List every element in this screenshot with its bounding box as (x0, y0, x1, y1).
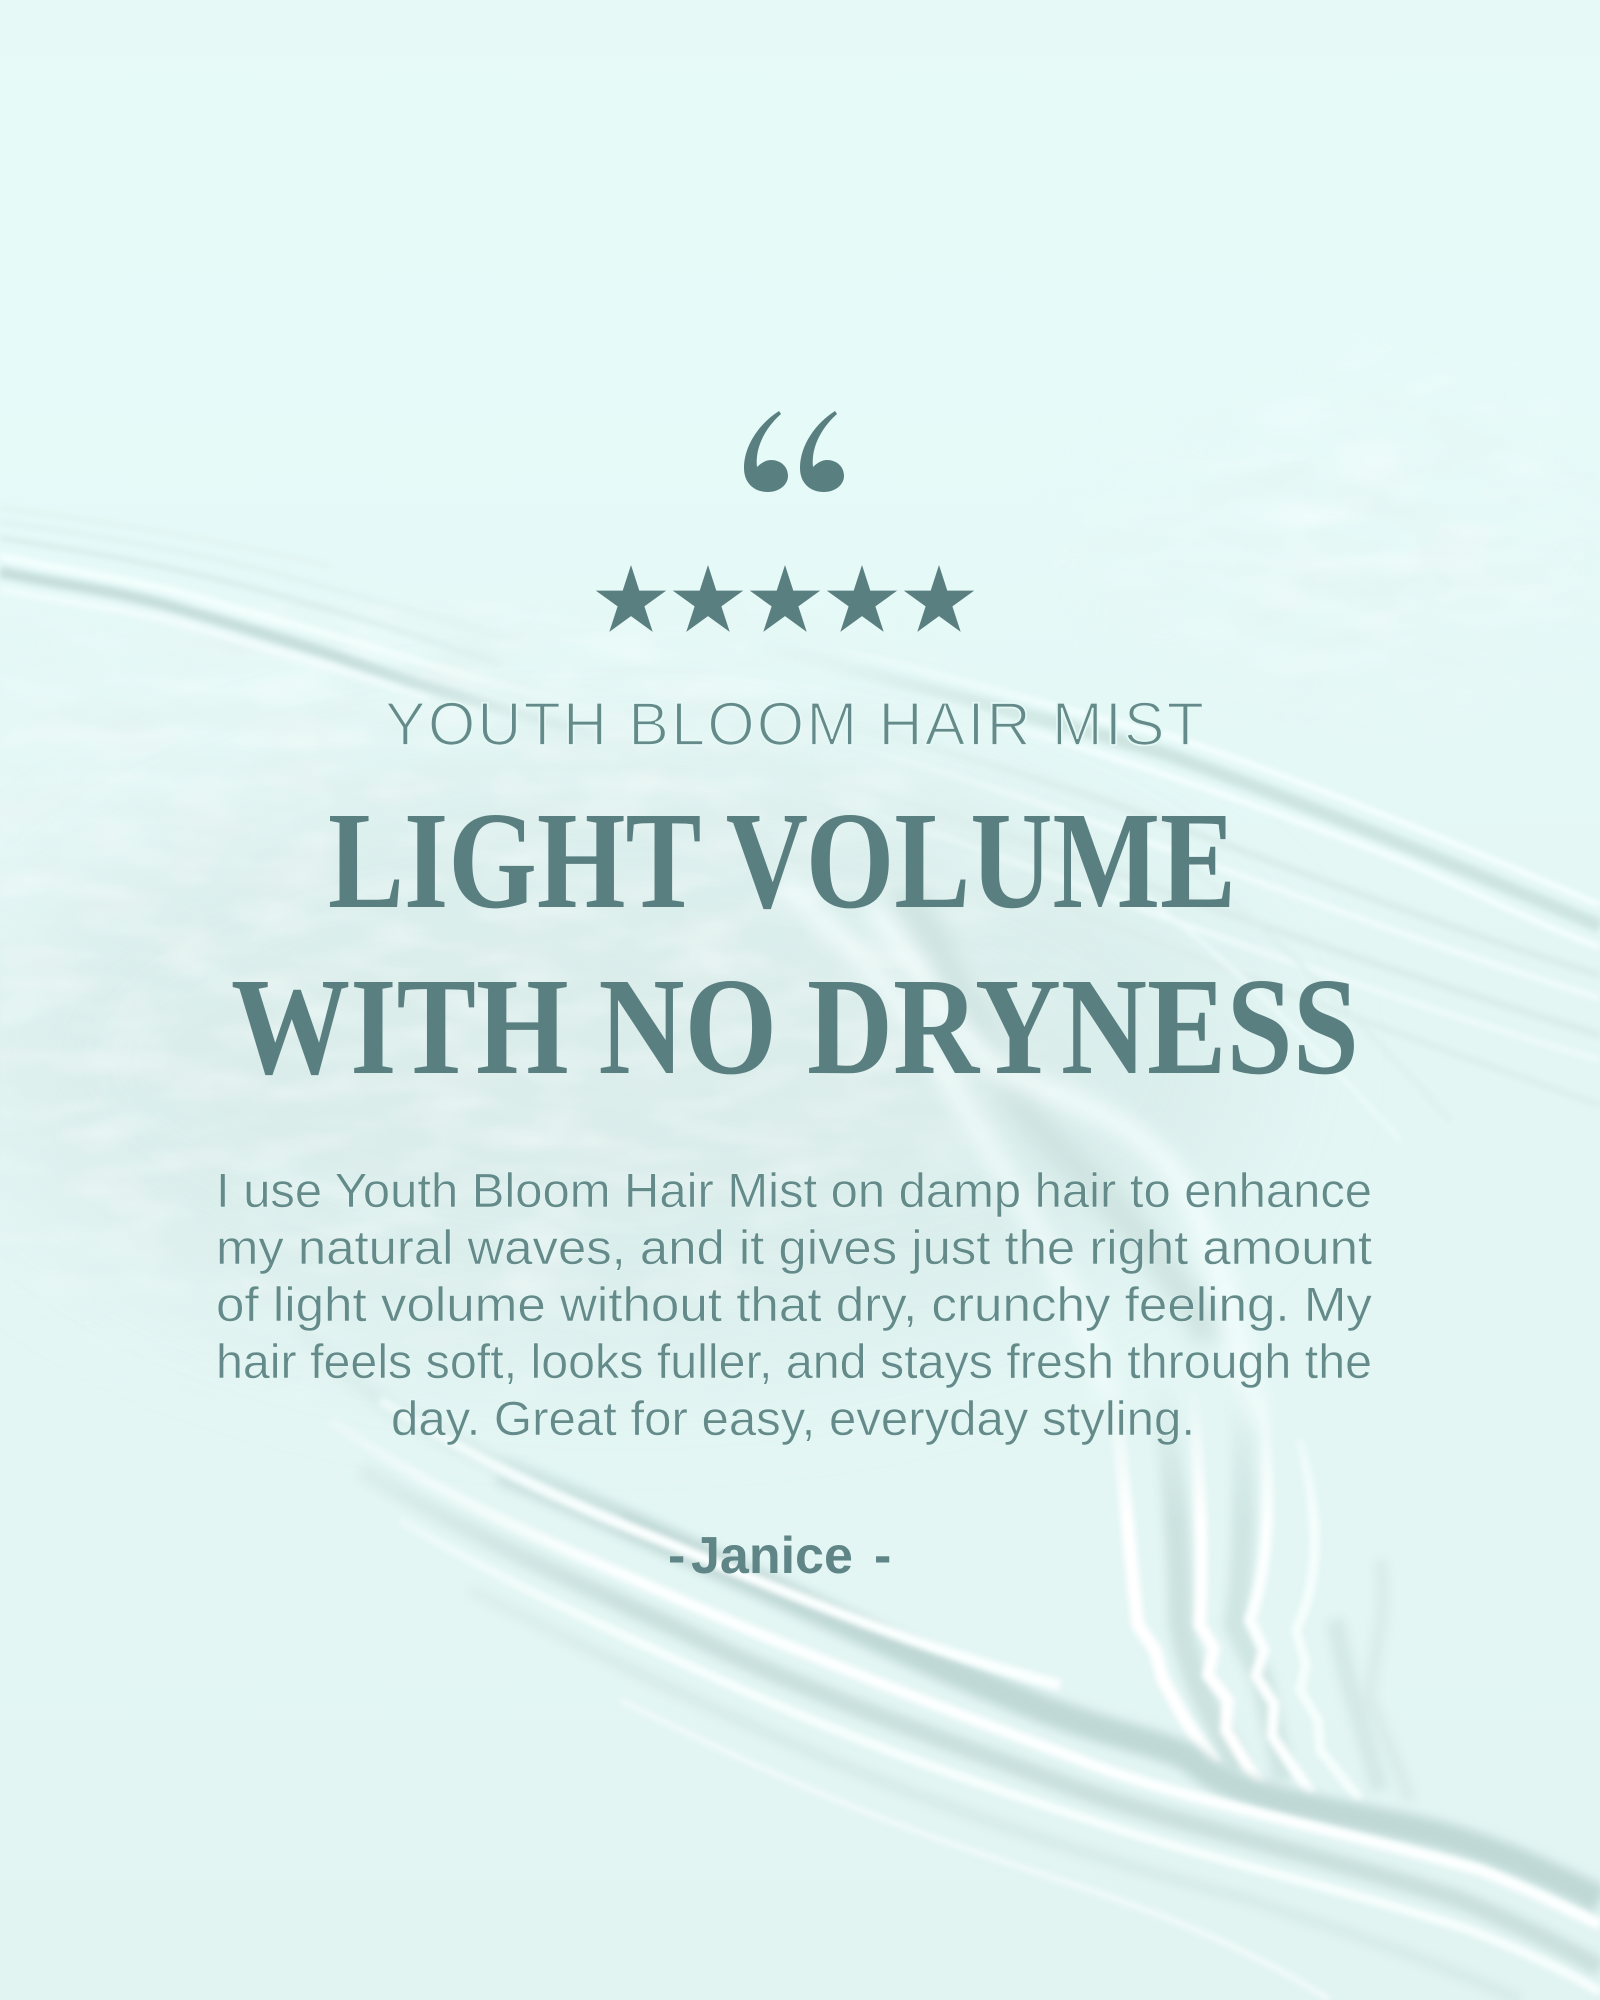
review body text: I use Youth Bloom Hair Mist on damp hair to enhance (216, 1165, 1372, 1218)
headline: WITH NO DRYNESS (231, 950, 1359, 1104)
fine streaks running to the right edge (878, 675, 1600, 1058)
reviewer name: Janice (691, 1527, 853, 1585)
review body text (216, 1165, 1372, 1446)
headline: LIGHT VOLUME (328, 784, 1236, 938)
vertical ripple bunch lower right (1114, 1422, 1408, 1800)
reviewer name: - (668, 1527, 685, 1585)
review body text: my natural waves, and it gives just the right amount (216, 1222, 1372, 1275)
reviewer name: - (874, 1527, 891, 1585)
main lower diagonal ripple band (366, 1394, 1600, 2000)
review body text: hair feels soft, looks fuller, and stays fresh through the (216, 1336, 1372, 1389)
background: pale water surface with ripples (0, 448, 1600, 2000)
review body text: day. Great for easy, everyday styling. (391, 1393, 1195, 1446)
icon: opening quotation mark (744, 411, 844, 492)
testimonial poster canvas (0, 411, 1600, 2000)
central branch streaks (780, 880, 1255, 1425)
headline (231, 784, 1359, 1104)
five star rating (596, 565, 974, 632)
review body text: of light volume without that dry, crunchy feeling. My (216, 1279, 1372, 1332)
product name subtitle: YOUTH BLOOM HAIR MIST (385, 690, 1204, 758)
upper-left ripple band (0, 538, 551, 724)
